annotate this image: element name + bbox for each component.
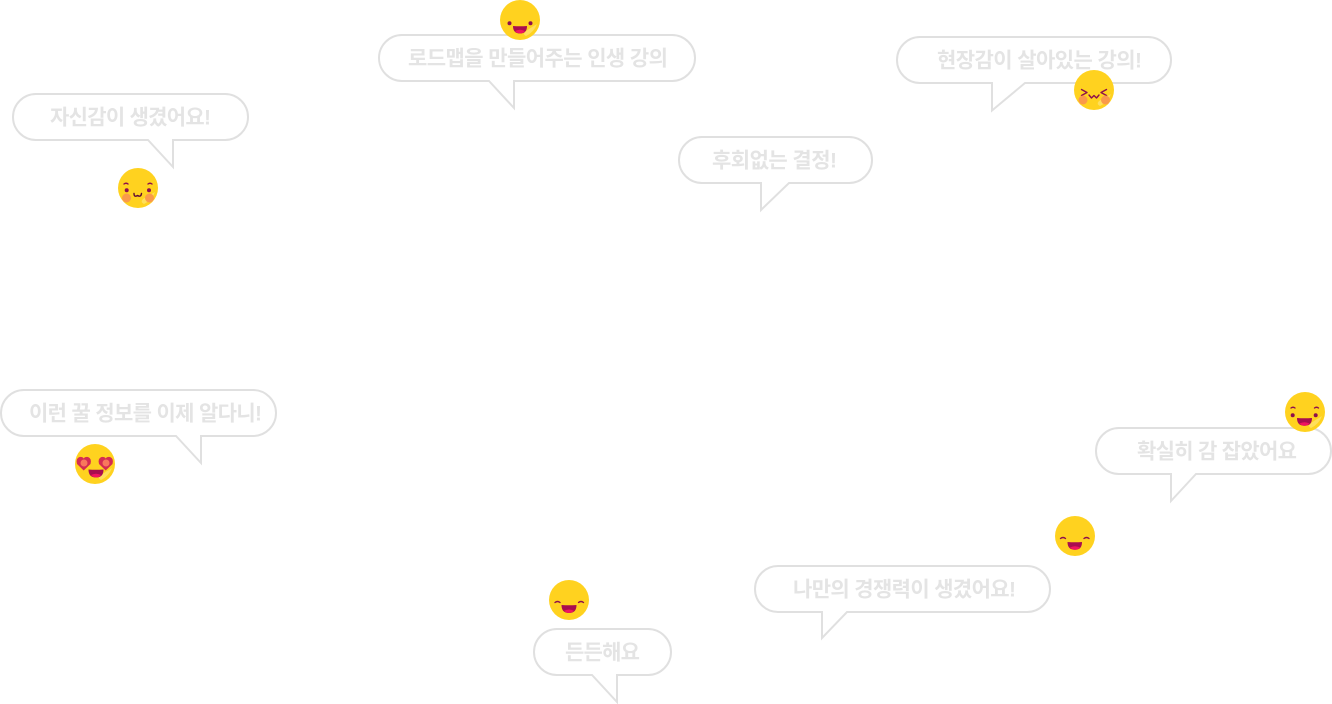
speech bubble: competitive edge [755,566,1050,638]
bubble outline [755,566,1050,638]
bubble outline [13,94,248,167]
icon: blushing emoji [118,168,158,208]
bubble outline [1,390,276,463]
bubble outline [679,137,872,210]
bubble text: 든든해요 [565,642,640,664]
icon: happy closed-eye emoji right [1055,516,1095,556]
speech bubble: confidence [13,94,248,167]
speech bubble: no regrets [679,137,872,210]
bubble text: 후회없는 결정! [712,150,837,172]
speech bubble: honey tips [1,390,276,463]
icon: laughing emoji with brows [1285,392,1325,432]
bubble outline [897,37,1171,110]
bubble outline [379,35,695,108]
icon: happy closed-eye emoji bottom [549,580,589,620]
speech bubble: got a clear sense [1096,428,1331,501]
bubble text: 로드맵을 만들어주는 인생 강의 [408,48,668,70]
speech bubble: roadmap lecture [379,35,695,108]
bubble text: 현장감이 살아있는 강의! [937,50,1142,72]
bubble text: 이런 꿀 정보를 이제 알다니! [29,402,262,426]
bubble text: 자신감이 생겼어요! [50,106,211,130]
bubble outline [1096,428,1331,501]
bubble text: 나만의 경쟁력이 생겼어요! [793,578,1016,602]
speech bubble: reassuring [534,629,671,702]
icon: heart-eyes emoji [75,444,115,484]
icon: squinting emoji [1074,70,1114,110]
speech bubble: realistic lecture [897,37,1171,110]
icon: smiling emoji [500,0,540,40]
bubble text: 확실히 감 잡았어요 [1137,440,1297,464]
bubble outline [534,629,671,702]
